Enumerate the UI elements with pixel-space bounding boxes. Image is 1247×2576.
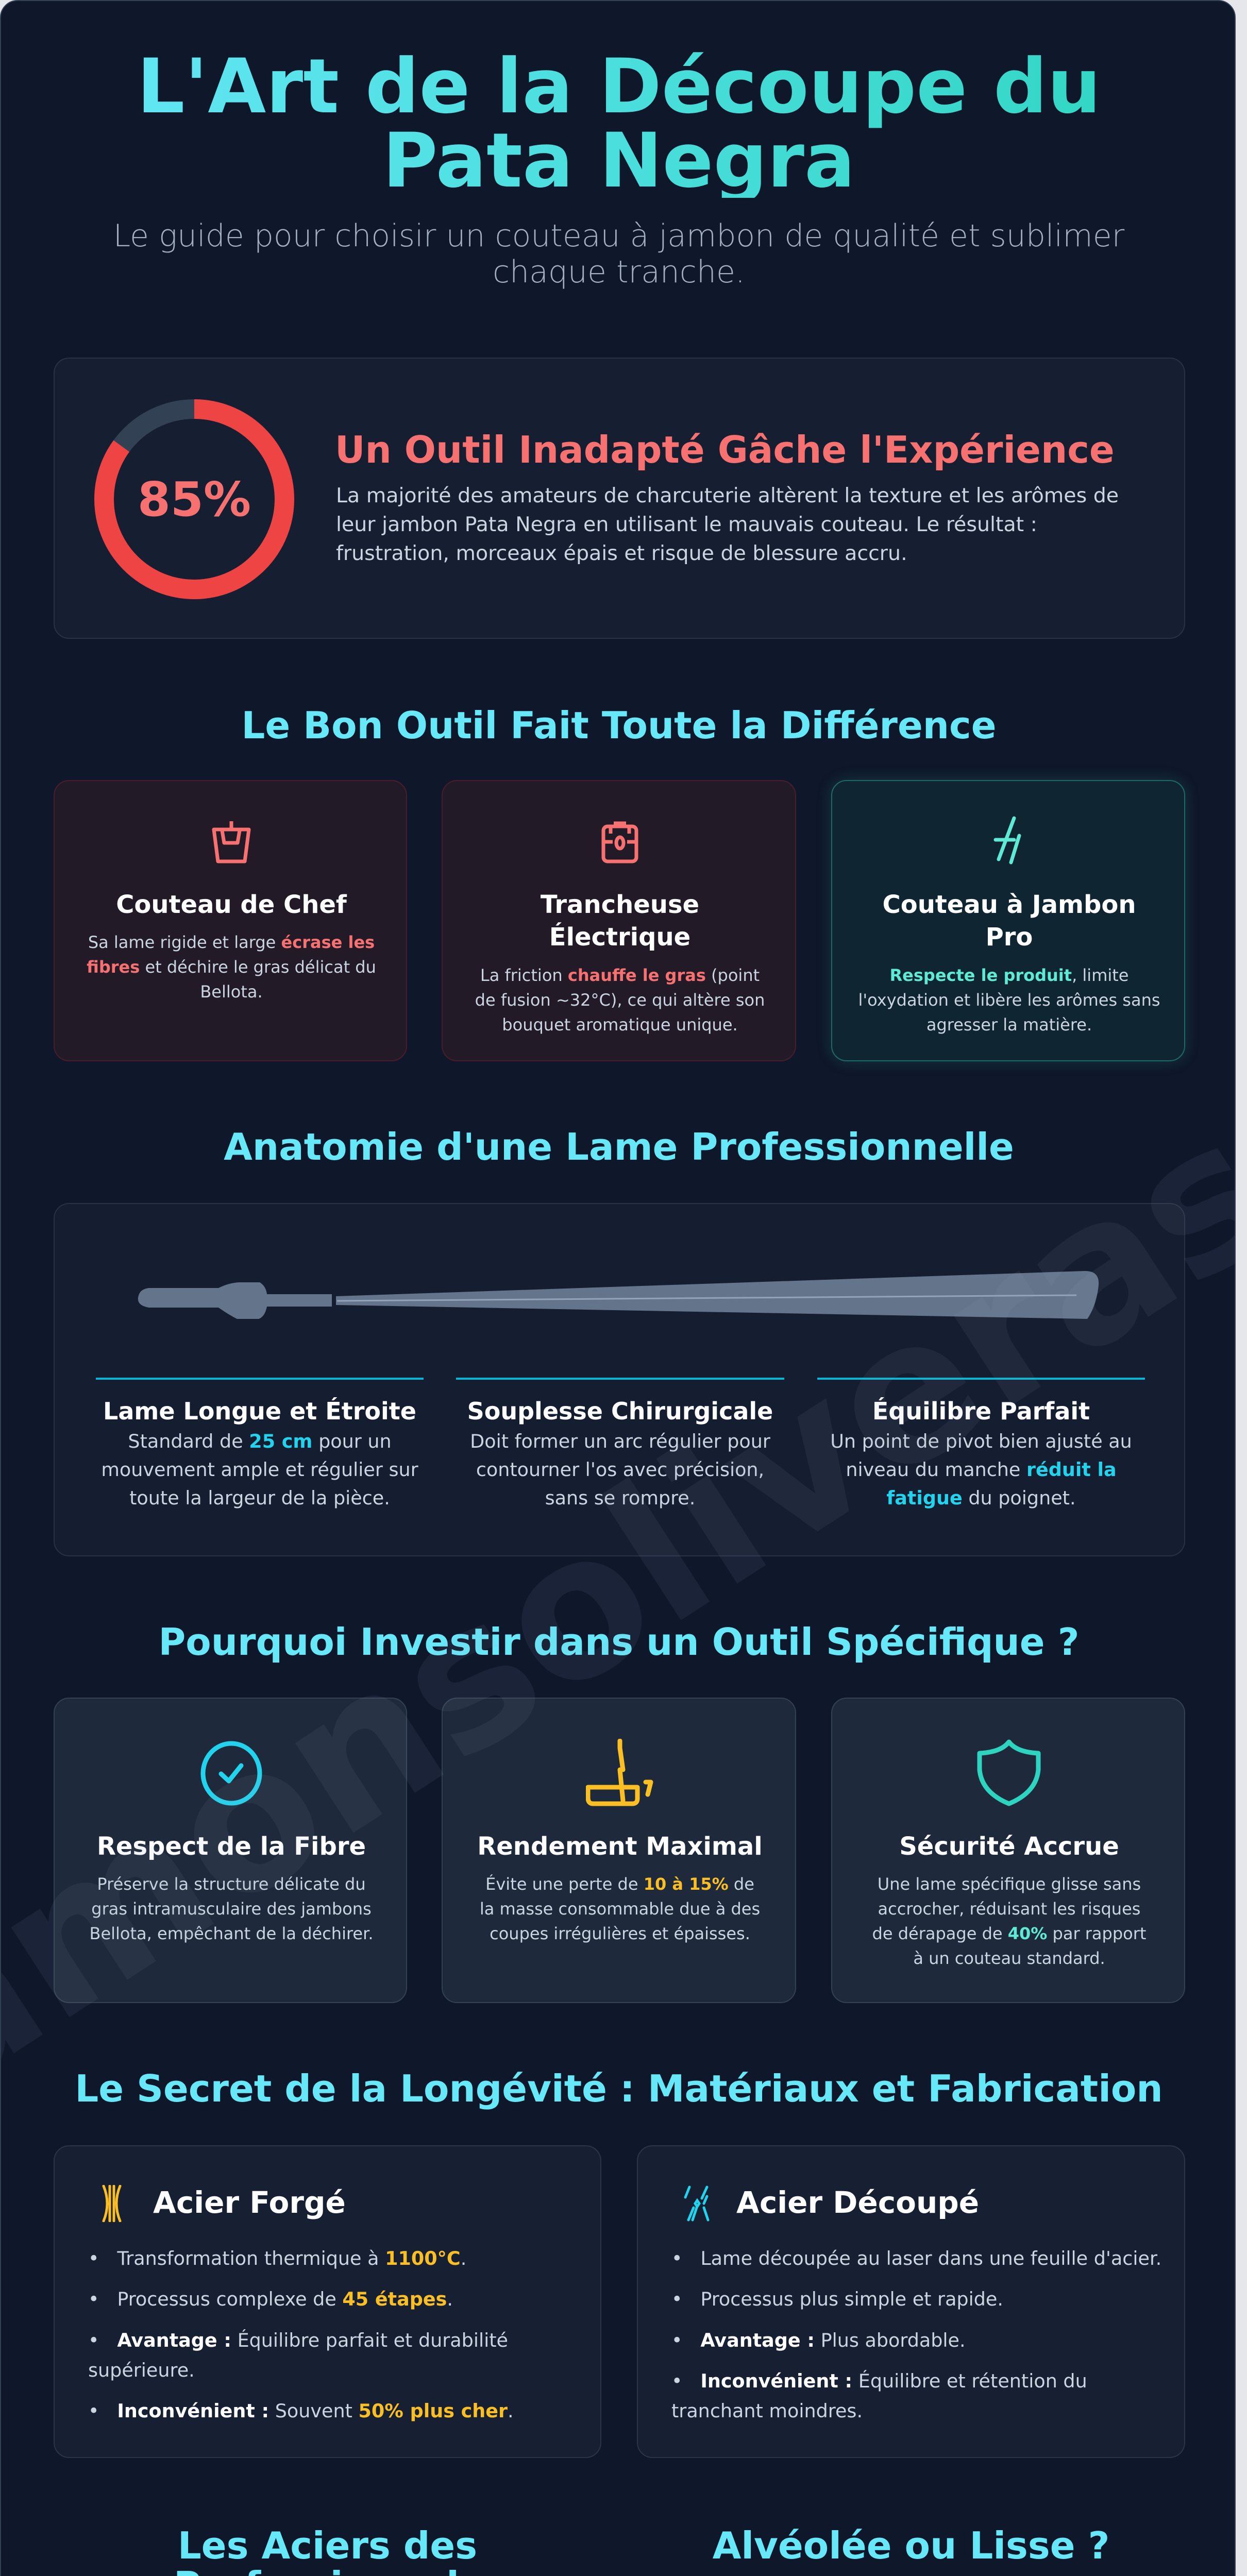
panel: anatomie bbox=[54, 1203, 1185, 1556]
icon: forge bbox=[102, 2185, 122, 2222]
bullet list bbox=[88, 2244, 583, 2429]
panel: couteau à jambon pro bbox=[831, 780, 1185, 1061]
description: de fusion ~32°C), ce qui altère son bbox=[475, 990, 765, 1010]
bullet list: supérieure. bbox=[88, 2359, 195, 2381]
feature: équilibre: Un point de pivot bien ajusté au bbox=[830, 1430, 1132, 1452]
description: la masse consommable due à des bbox=[480, 1899, 760, 1919]
panel: acier découpé bbox=[637, 2145, 1185, 2458]
title bbox=[1, 49, 1237, 198]
feature: souplesse bbox=[456, 1378, 784, 1509]
feature: souplesse: contourner l'os avec précision, bbox=[476, 1459, 764, 1481]
heading: le bon outil: Le Bon Outil Fait Toute la Différence bbox=[241, 704, 997, 747]
icon: cup bbox=[212, 821, 250, 863]
description: Préserve la structure délicate du bbox=[97, 1874, 366, 1894]
title: Acier Découpé bbox=[736, 2185, 979, 2220]
stat paragraph: La majorité des amateurs de charcuterie altèrent la texture et les arômes de bbox=[336, 484, 1119, 507]
stat heading: Un Outil Inadapté Gâche l'Expérience bbox=[335, 428, 1115, 471]
title: Acier Forgé bbox=[153, 2185, 346, 2220]
description: coupes irrégulières et épaisses. bbox=[490, 1924, 750, 1943]
panel: acier forgé bbox=[54, 2145, 601, 2458]
heading: anatomie: Anatomie d'une Lame Professionnelle bbox=[224, 1125, 1014, 1168]
feature: lame longue: Lame Longue et Étroite bbox=[103, 1397, 416, 1425]
bullet list: • Lame découpée au laser dans une feuille d'acier. bbox=[671, 2247, 1161, 2269]
description: Une lame spécifique glisse sans bbox=[878, 1874, 1141, 1894]
feature: lame longue bbox=[96, 1378, 424, 1509]
title: Sécurité Accrue bbox=[899, 1832, 1119, 1861]
description: de dérapage de 40% par rapport bbox=[872, 1924, 1146, 1943]
description: Bellota, empêchant de la déchirer. bbox=[90, 1924, 373, 1943]
feature: lame longue: toute la largeur de la pièce. bbox=[129, 1487, 390, 1509]
heading: alvéolée ou lisse: Alvéolée ou Lisse ? bbox=[713, 2524, 1109, 2567]
feature: équilibre: Équilibre Parfait bbox=[872, 1397, 1090, 1425]
heading: les aciers des professionnels: Les Aciers des bbox=[178, 2524, 477, 2567]
subtitle: chaque tranche. bbox=[493, 254, 745, 290]
panel: stat 85% bbox=[54, 358, 1185, 639]
panel: couteau de chef bbox=[54, 780, 407, 1061]
panel: respect de la fibre bbox=[54, 1698, 407, 2003]
feature: souplesse: Souplesse Chirurgicale bbox=[467, 1397, 773, 1425]
donut chart 85% bbox=[94, 399, 294, 599]
panel: rendement maximal bbox=[442, 1698, 796, 2003]
description: Bellota. bbox=[200, 982, 263, 1002]
heading: pourquoi investir: Pourquoi Investir dans un Outil Spécifique ? bbox=[159, 1620, 1079, 1664]
description bbox=[858, 965, 1160, 1035]
description bbox=[87, 933, 376, 1002]
feature: souplesse: Doit former un arc régulier pour bbox=[470, 1430, 770, 1452]
icon: slicer bbox=[602, 821, 638, 863]
subtitle bbox=[113, 218, 1124, 290]
description bbox=[90, 1874, 373, 1943]
bullet list: • Avantage : Plus abordable. bbox=[671, 2329, 966, 2351]
description: à un couteau standard. bbox=[913, 1948, 1105, 1968]
stat paragraph: leur jambon Pata Negra en utilisant le mauvais couteau. Le résultat : bbox=[336, 513, 1037, 536]
description bbox=[475, 965, 765, 1035]
description: accrocher, réduisant les risques bbox=[878, 1899, 1140, 1919]
panel: trancheuse bbox=[442, 780, 796, 1061]
subtitle: Le guide pour choisir un couteau à jambon de qualité et sublimer bbox=[113, 218, 1124, 254]
description: agresser la matière. bbox=[926, 1015, 1092, 1035]
icon: knife slash bbox=[993, 816, 1021, 865]
feature: équilibre: niveau du manche réduit la bbox=[846, 1459, 1117, 1481]
description: La friction chauffe le gras (point bbox=[480, 965, 760, 985]
title: L'Art de la Découpe du bbox=[137, 43, 1101, 130]
title: Électrique bbox=[549, 923, 690, 952]
description: Respecte le produit, limite bbox=[890, 965, 1128, 985]
donut chart 85%: 85% bbox=[138, 472, 251, 527]
description: Évite une perte de 10 à 15% de bbox=[485, 1874, 754, 1894]
bullet list: • Processus plus simple et rapide. bbox=[671, 2288, 1003, 2310]
title bbox=[882, 890, 1136, 952]
description bbox=[480, 1874, 760, 1943]
bullet list: • Processus complexe de 45 étapes. bbox=[88, 2288, 453, 2310]
title: Couteau de Chef bbox=[116, 890, 347, 919]
feature: lame longue: Standard de 25 cm pour un bbox=[128, 1430, 392, 1452]
title bbox=[541, 890, 699, 952]
panel: sécurité accrue bbox=[831, 1698, 1185, 2003]
heading: les aciers des professionnels bbox=[54, 2526, 601, 2576]
bullet list: • Avantage : Équilibre parfait et durabilité bbox=[88, 2329, 508, 2351]
description: gras intramusculaire des jambons bbox=[91, 1899, 372, 1919]
icon: check circle bbox=[201, 1741, 262, 1805]
bullet list: • Inconvénient : Souvent 50% plus cher. bbox=[88, 2400, 514, 2422]
description: bouquet aromatique unique. bbox=[502, 1015, 738, 1035]
bullet list: tranchant moindres. bbox=[671, 2400, 863, 2422]
title: Respect de la Fibre bbox=[97, 1832, 366, 1861]
icon: knife and bowl bbox=[586, 1739, 653, 1806]
bullet list: • Inconvénient : Équilibre et rétention du bbox=[671, 2370, 1087, 2392]
description bbox=[872, 1874, 1146, 1968]
icon: shield bbox=[977, 1739, 1041, 1806]
description: l'oxydation et libère les arômes sans bbox=[858, 990, 1160, 1010]
title: Trancheuse bbox=[541, 890, 699, 919]
feature: équilibre bbox=[817, 1378, 1145, 1509]
feature: lame longue: mouvement ample et régulier sur bbox=[101, 1459, 418, 1481]
description: Sa lame rigide et large écrase les bbox=[88, 933, 375, 952]
description: fibres et déchire le gras délicat du bbox=[87, 957, 376, 977]
title: Couteau à Jambon bbox=[882, 890, 1136, 919]
title: Rendement Maximal bbox=[477, 1832, 763, 1861]
stat paragraph bbox=[336, 484, 1119, 565]
feature: souplesse: sans se rompre. bbox=[545, 1487, 695, 1509]
title: Pata Negra bbox=[382, 117, 855, 205]
icon: laser cut bbox=[681, 2185, 712, 2222]
bullet list bbox=[671, 2244, 1166, 2429]
feature: équilibre: fatigue du poignet. bbox=[886, 1487, 1076, 1509]
stat paragraph: frustration, morceaux épais et risque de blessure accru. bbox=[336, 541, 907, 565]
knife illustration bbox=[138, 1271, 1099, 1319]
heading: secret longévité: Le Secret de la Longévité : Matériaux et Fabrication bbox=[75, 2067, 1163, 2110]
title: Pro bbox=[986, 923, 1033, 952]
bullet list: • Transformation thermique à 1100°C. bbox=[88, 2247, 466, 2269]
